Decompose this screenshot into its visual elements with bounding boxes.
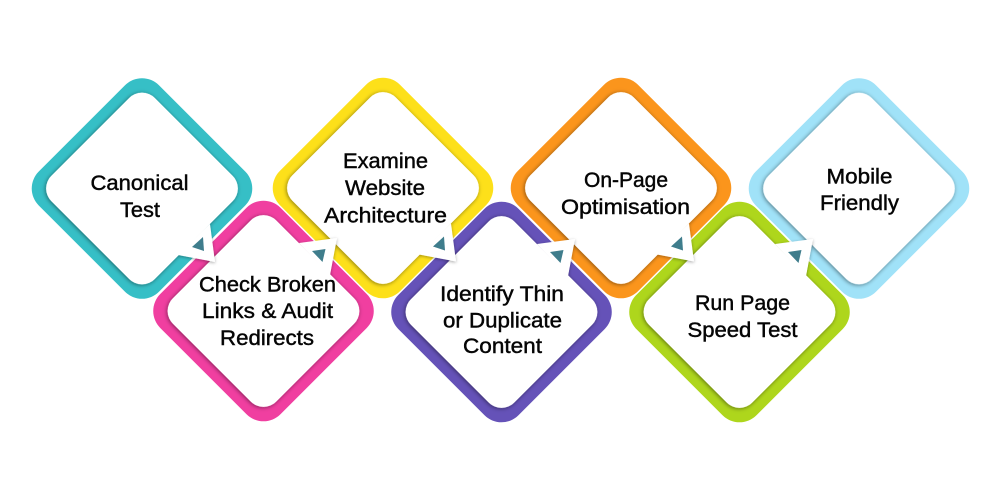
label: Identify Thin or Duplicate Content: or Duplicate (443, 308, 562, 332)
arrow connector: Examine Website Architecture to Identify Thin or Duplicate Content (280, 85, 486, 291)
label: On-Page Optimisation: Optimisation (561, 195, 690, 219)
label: Check Broken Links & Audit Redirects: Check Broken (199, 272, 336, 296)
diamond: Examine Website Architecture (263, 68, 503, 308)
diamond: Identify Thin or Duplicate Content (381, 192, 622, 432)
label: Run Page Speed Test: Run Page (695, 291, 790, 315)
label: Identify Thin or Duplicate Content: Content (463, 334, 542, 358)
label: Identify Thin or Duplicate Content: Identify Thin (440, 282, 564, 306)
diamond: On-Page Optimisation (501, 68, 741, 308)
label: Check Broken Links & Audit Redirects (199, 272, 336, 350)
diamond: Canonical Test (22, 68, 262, 309)
arrow connector: Run Page Speed Test to Mobile Friendly (636, 209, 843, 415)
diamond: Check Broken Links and Audit Redirects (143, 191, 384, 431)
arrow connector: On-Page Optimisation to Run Page Speed Test (518, 85, 724, 291)
label: Run Page Speed Test (688, 291, 798, 342)
label: Mobile Friendly (820, 164, 899, 215)
label: Run Page Speed Test: Speed Test (688, 318, 798, 342)
label: Mobile Friendly: Mobile (826, 164, 892, 188)
label: Check Broken Links & Audit Redirects: Links & Audit (202, 299, 333, 323)
label: Mobile Friendly: Friendly (820, 191, 899, 215)
label: Identify Thin or Duplicate Content (440, 282, 564, 358)
label: On-Page Optimisation: On-Page (584, 168, 668, 192)
label: Canonical Test (90, 171, 188, 222)
label: On-Page Optimisation (561, 168, 690, 219)
label: Check Broken Links & Audit Redirects: Redirects (220, 326, 314, 350)
label: Examine Website Architecture: Architecture (324, 204, 447, 228)
diamond: Mobile Friendly (739, 68, 979, 309)
arrow connector: Canonical Test to Check Broken Links (39, 85, 245, 292)
label: Examine Website Architecture (324, 149, 447, 228)
arrow connector: Identify Thin or Duplicate Content to On-Page Optimisation (398, 209, 605, 415)
label: Canonical Test: Test (120, 198, 160, 222)
diamond: Run Page Speed Test (619, 192, 860, 432)
arrow connector: Check Broken Links to Examine Website Architecture (160, 208, 367, 414)
label: Examine Website Architecture: Examine (343, 149, 428, 173)
label: Examine Website Architecture: Website (345, 176, 425, 200)
label: Canonical Test: Canonical (90, 171, 188, 195)
